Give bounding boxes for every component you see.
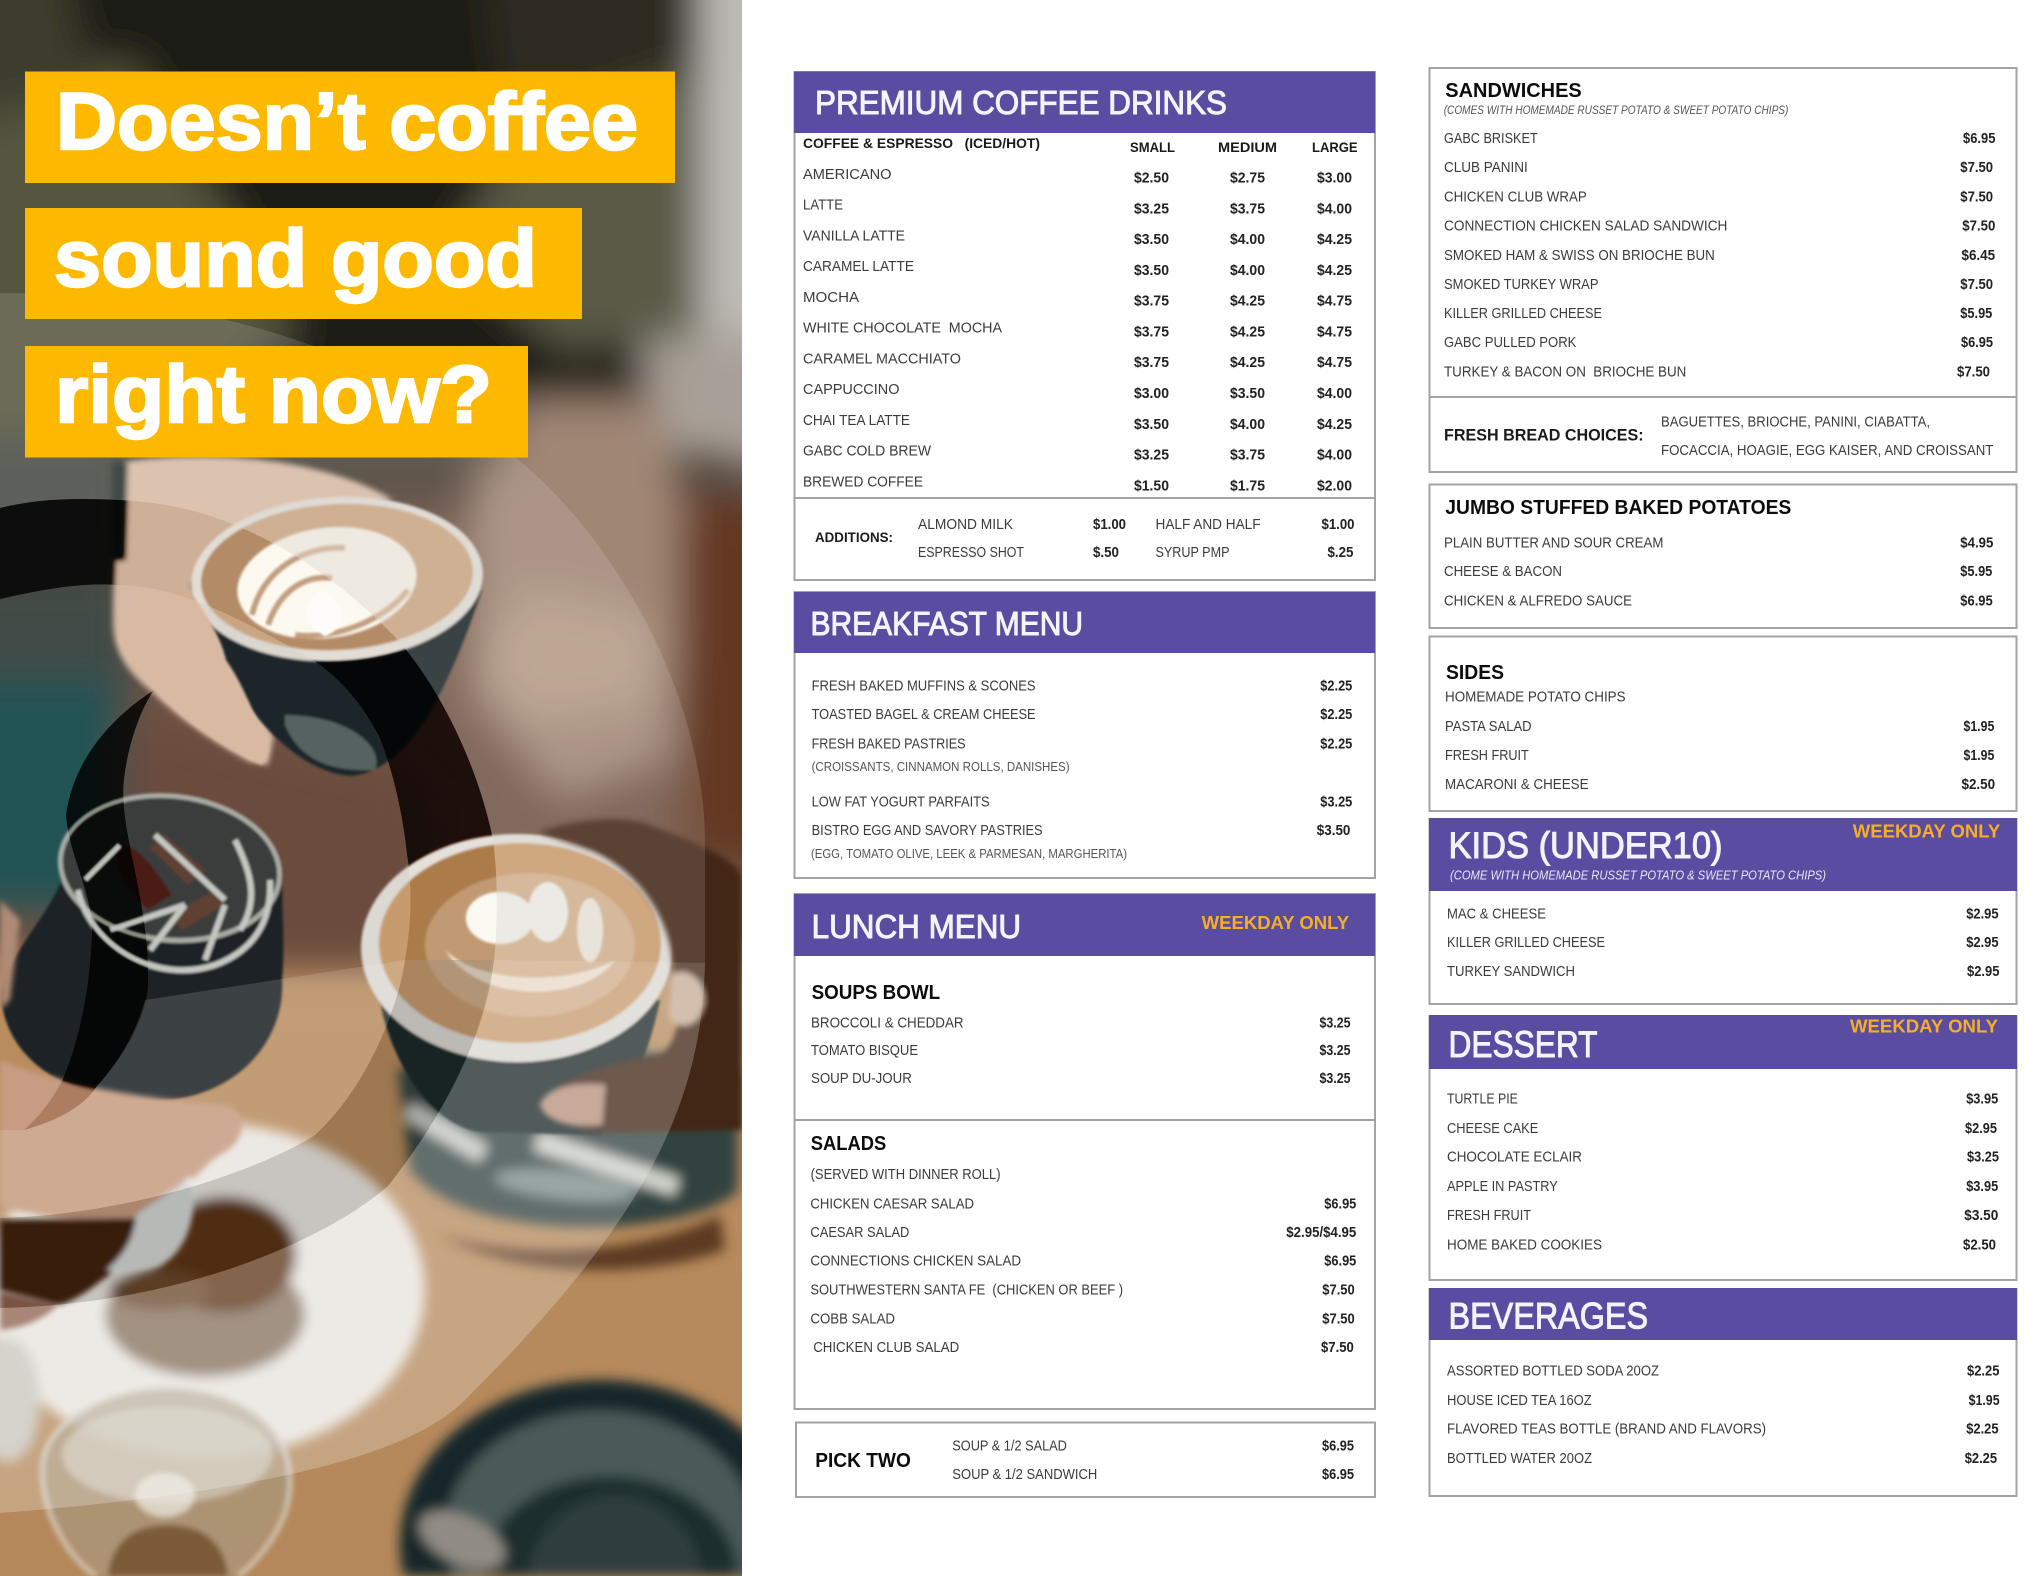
header: kids: KIDS (UNDER10) (1448, 825, 1722, 866)
breakfast rows: FRESH BAKED MUFFINS & SCONES (812, 679, 1036, 695)
headline (25, 72, 675, 458)
sandwich rows (1444, 131, 1995, 380)
icon: hand holding glass (0, 900, 242, 1330)
soups: SOUPS BOWL (812, 982, 940, 1004)
drink rows: VANILLA LATTE (803, 228, 905, 244)
additions: $.50 (1093, 545, 1119, 561)
sandwich rows: SMOKED TURKEY WRAP (1444, 277, 1598, 293)
sandwich rows: CHICKEN CLUB WRAP (1444, 190, 1587, 206)
drink rows: CAPPUCCINO (803, 382, 900, 398)
plate and cookie (0, 1122, 425, 1458)
panel: jumbo stuffed baked potatoes: CHEESE & BACON (1444, 564, 1562, 580)
saucer under second cup (398, 1048, 738, 1227)
drink rows: $4.75 (1317, 294, 1352, 310)
icon: iced coffee glass (2, 785, 287, 1101)
header: kids: WEEKDAY ONLY (1853, 822, 2000, 842)
breakfast rows: BISTRO EGG AND SAVORY PASTRIES (812, 823, 1043, 839)
sandwich rows: GABC PULLED PORK (1444, 335, 1577, 351)
salads: $2.95/$4.95 (1286, 1225, 1356, 1241)
panel: pick two: SOUP & 1/2 SANDWICH (952, 1467, 1097, 1483)
panel: pick two: SOUP & 1/2 SALAD (952, 1438, 1067, 1454)
additions: $1.00 (1093, 517, 1126, 533)
breakfast rows: FRESH BAKED PASTRIES (812, 736, 966, 752)
breakfast rows: $3.50 (1317, 823, 1350, 839)
kids rows: $2.95 (1967, 964, 1999, 980)
salads: $7.50 (1322, 1282, 1355, 1298)
dessert rows (1447, 1092, 1999, 1253)
drink rows: $4.25 (1317, 417, 1352, 433)
panel: jumbo stuffed baked potatoes: $4.95 (1960, 536, 1993, 552)
sandwich rows: CLUB PANINI (1444, 160, 1528, 176)
additions: SYRUP PMP (1156, 545, 1230, 561)
additions: $1.00 (1322, 517, 1354, 533)
header: breakfast menu (794, 592, 1375, 653)
column headings: MEDIUM (1218, 139, 1277, 155)
header: premium coffee drinks: PREMIUM COFFEE DRINKS (815, 84, 1227, 121)
header: beverages (1429, 1288, 2017, 1340)
drink rows: $3.00 (1134, 386, 1169, 402)
salads: CAESAR SALAD (810, 1225, 909, 1241)
drink rows: WHITE CHOCOLATE MOCHA (803, 321, 1002, 337)
drink rows: $3.50 (1134, 232, 1169, 248)
dessert rows: HOME BAKED COOKIES (1447, 1237, 1602, 1253)
drink rows: $3.25 (1134, 201, 1169, 217)
panel: breakfast menu (794, 592, 1375, 878)
drink rows: $4.00 (1317, 448, 1352, 464)
salads: COBB SALAD (810, 1312, 895, 1328)
fresh bread choices: BAGUETTES, BRIOCHE, PANINI, CIABATTA, (1661, 414, 1930, 430)
fresh bread choices: FRESH BREAD CHOICES: (1444, 426, 1644, 444)
icon: hand holding second cup (539, 819, 742, 1133)
panel: pick two (796, 1422, 1375, 1497)
drink rows: CARAMEL MACCHIATO (803, 351, 961, 367)
dessert rows: TURTLE PIE (1447, 1092, 1518, 1108)
drink rows: $4.25 (1317, 232, 1352, 248)
kids rows: MAC & CHEESE (1447, 906, 1546, 922)
sandwich rows: $7.50 (1960, 160, 1993, 176)
header: lunch menu: WEEKDAY ONLY (1202, 913, 1349, 933)
soups: $3.25 (1320, 1071, 1350, 1087)
drink rows: $3.75 (1230, 448, 1265, 464)
dessert rows: $3.25 (1967, 1150, 1999, 1166)
kids rows: TURKEY SANDWICH (1447, 964, 1575, 980)
panel: sides: HOMEMADE POTATO CHIPS (1445, 690, 1626, 706)
drink rows: $2.75 (1230, 171, 1265, 187)
drink rows: BREWED COFFEE (803, 474, 923, 490)
salads: CHICKEN CLUB SALAD (813, 1340, 959, 1356)
salads (810, 1133, 1356, 1356)
header: lunch menu (794, 894, 1375, 956)
overlay: quote tail highlight (0, 960, 705, 1513)
beverage rows: $2.25 (1967, 1364, 1999, 1380)
dessert rows: $3.50 (1964, 1208, 1998, 1224)
heading: sandwiches (1444, 80, 1788, 117)
drink rows: AMERICANO (803, 167, 892, 183)
breakfast rows: (EGG, TOMATO OLIVE, LEEK & PARMESAN, MARGHERITA) (811, 846, 1127, 861)
sandwich rows: KILLER GRILLED CHEESE (1444, 306, 1602, 322)
drink rows (803, 167, 1352, 494)
salads: $7.50 (1322, 1312, 1355, 1328)
dessert rows: CHOCOLATE ECLAIR (1447, 1150, 1582, 1166)
drink rows: $4.25 (1230, 294, 1265, 310)
kids rows: KILLER GRILLED CHEESE (1447, 935, 1605, 951)
dessert rows: APPLE IN PASTRY (1447, 1179, 1558, 1195)
header: dessert: DESSERT (1448, 1024, 1598, 1065)
icon: second coffee cup (361, 834, 673, 1135)
column headings: SMALL (1130, 139, 1175, 155)
soups (811, 982, 1350, 1087)
beverage rows: ASSORTED BOTTLED SODA 20OZ (1447, 1364, 1659, 1380)
photo: coffee cheers with overlay (0, 0, 802, 1576)
dark saucer (400, 1380, 800, 1576)
icon: first coffee cup (187, 489, 487, 776)
soups: SOUP DU-JOUR (811, 1071, 912, 1087)
dessert rows: $3.95 (1966, 1179, 1998, 1195)
soups: TOMATO BISQUE (811, 1043, 918, 1059)
salads: CHICKEN CAESAR SALAD (810, 1196, 974, 1212)
overlay: inner quote highlight (0, 960, 405, 1218)
drink rows: $3.75 (1134, 324, 1169, 340)
drink rows: $4.25 (1317, 263, 1352, 279)
panel: pick two: PICK TWO (815, 1450, 911, 1472)
drink rows: GABC COLD BREW (803, 444, 931, 460)
heading: sandwiches: SANDWICHES (1445, 80, 1582, 102)
panel: sandwiches (1429, 68, 2017, 472)
beverage rows: $2.25 (1966, 1422, 1999, 1438)
panel: sides: FRESH FRUIT (1445, 748, 1529, 764)
overlay: light outer quote arc (0, 293, 705, 1513)
panel: jumbo stuffed baked potatoes: PLAIN BUTTER AND SOUR CREAM (1444, 536, 1663, 552)
soups: $3.25 (1320, 1016, 1350, 1032)
soups: BROCCOLI & CHEDDAR (811, 1016, 964, 1032)
panel: pick two: $6.95 (1322, 1438, 1354, 1454)
drink rows: $4.00 (1230, 232, 1265, 248)
overlay: lower quote ring (0, 960, 494, 1308)
panel: sides: $1.95 (1964, 748, 1994, 764)
column headings (803, 135, 1358, 155)
yellow banner line 3: right now? (55, 350, 492, 440)
beverage rows: HOUSE ICED TEA 16OZ (1447, 1393, 1592, 1409)
drink rows: $4.25 (1230, 355, 1265, 371)
dessert rows: CHEESE CAKE (1447, 1121, 1539, 1137)
yellow banner line 3 (25, 346, 528, 458)
breakfast rows: TOASTED BAGEL & CREAM CHEESE (812, 707, 1036, 723)
beverage rows (1447, 1364, 2000, 1467)
overlay: high-contrast quote band and crescent (0, 499, 497, 1130)
yellow banner line 2: sound good (54, 214, 537, 304)
drink rows: $1.50 (1134, 478, 1169, 494)
drink rows: $3.50 (1230, 386, 1265, 402)
salads: $6.95 (1324, 1254, 1356, 1270)
drink rows: $4.75 (1317, 324, 1352, 340)
panel: jumbo stuffed baked potatoes (1430, 484, 2016, 628)
icon: hand holding first cup (112, 456, 393, 765)
salads: SALADS (811, 1133, 886, 1155)
header: kids (1429, 818, 2017, 891)
drink rows: $3.75 (1230, 201, 1265, 217)
drink rows: $4.00 (1230, 417, 1265, 433)
breakfast rows: $3.25 (1320, 794, 1352, 810)
yellow banner line 1 (25, 72, 675, 183)
kids rows: $2.95 (1966, 935, 1999, 951)
panel: sides: MACARONI & CHEESE (1445, 777, 1589, 793)
sandwich rows: $5.95 (1960, 306, 1992, 322)
drink rows: $4.25 (1230, 324, 1265, 340)
breakfast rows: (CROISSANTS, CINNAMON ROLLS, DANISHES) (812, 759, 1070, 774)
panel: sides (1430, 636, 2016, 811)
dessert rows: $3.95 (1966, 1092, 1998, 1108)
drink rows: MOCHA (803, 290, 859, 306)
panel: pick two: $6.95 (1322, 1467, 1354, 1483)
drink rows: $4.00 (1317, 386, 1352, 402)
sandwich rows: $7.50 (1960, 190, 1993, 206)
soups: $3.25 (1320, 1043, 1350, 1059)
fresh bread choices (1444, 414, 1994, 459)
yellow banner line 2 (25, 208, 582, 319)
header: beverages: BEVERAGES (1448, 1296, 1648, 1336)
breakfast rows: $2.25 (1320, 707, 1352, 723)
kids rows: $2.95 (1966, 906, 1999, 922)
panel: sides: $1.95 (1964, 719, 1994, 735)
panel: jumbo stuffed baked potatoes: JUMBO STUFFED BAKED POTATOES (1445, 497, 1791, 519)
header: kids: (COME WITH HOMEMADE RUSSET POTATO & SWEET POTATO CHIPS) (1450, 868, 1826, 882)
panel: jumbo stuffed baked potatoes: $5.95 (1960, 564, 1992, 580)
panel: premium coffee drinks (794, 72, 1375, 580)
panel: jumbo stuffed baked potatoes: CHICKEN & ALFREDO SAUCE (1444, 593, 1632, 609)
kids rows (1447, 906, 1999, 980)
sandwich rows: CONNECTION CHICKEN SALAD SANDWICH (1444, 219, 1727, 235)
breakfast rows (811, 679, 1352, 861)
drink rows: CHAI TEA LATTE (803, 413, 910, 429)
drink rows: LATTE (803, 198, 843, 214)
panel: sides: $2.50 (1962, 777, 1995, 793)
header: dessert (1429, 1015, 2017, 1069)
yellow banner line 1: Doesn’t coffee (56, 77, 638, 167)
breakfast rows: LOW FAT YOGURT PARFAITS (812, 794, 990, 810)
header: lunch menu: LUNCH MENU (812, 908, 1021, 945)
drink rows: $4.75 (1317, 355, 1352, 371)
additions: ESPRESSO SHOT (918, 545, 1024, 561)
left glass (0, 1338, 40, 1462)
header: premium coffee drinks (794, 72, 1375, 133)
beverage rows: FLAVORED TEAS BOTTLE (BRAND AND FLAVORS) (1447, 1422, 1766, 1438)
drink rows: $2.00 (1317, 478, 1352, 494)
sandwich rows: SMOKED HAM & SWISS ON BRIOCHE BUN (1444, 248, 1715, 264)
panel: sides: PASTA SALAD (1445, 719, 1532, 735)
salads: $7.50 (1321, 1340, 1354, 1356)
beverage rows: $2.25 (1965, 1451, 1997, 1467)
drink rows: $3.25 (1134, 448, 1169, 464)
sandwich rows: $7.50 (1957, 364, 1990, 380)
header: breakfast menu: BREAKFAST MENU (810, 605, 1083, 642)
drink rows: $2.50 (1134, 171, 1169, 187)
salads: $6.95 (1324, 1196, 1356, 1212)
breakfast rows: $2.25 (1320, 736, 1352, 752)
panel: dessert (1429, 1015, 2017, 1280)
panel: lunch menu (794, 894, 1375, 1409)
additions: ADDITIONS: (815, 529, 893, 545)
drink rows: $3.00 (1317, 171, 1352, 187)
sandwich rows: $6.95 (1963, 131, 1995, 147)
sandwich rows: $7.50 (1962, 219, 1995, 235)
additions (815, 517, 1354, 561)
column headings: COFFEE & ESPRESSO (ICED/HOT) (803, 135, 1040, 151)
fresh bread choices: FOCACCIA, HOAGIE, EGG KAISER, AND CROISSANT (1661, 443, 1994, 459)
beverage rows: BOTTLED WATER 20OZ (1447, 1451, 1592, 1467)
dessert rows: $2.50 (1963, 1237, 1996, 1253)
heading: sandwiches: (COMES WITH HOMEMADE RUSSET POTATO & SWEET POTATO CHIPS) (1444, 103, 1788, 117)
drink rows: $3.75 (1134, 355, 1169, 371)
salads: CONNECTIONS CHICKEN SALAD (810, 1254, 1021, 1270)
drink rows: $4.00 (1317, 201, 1352, 217)
dessert rows: FRESH FRUIT (1447, 1208, 1531, 1224)
drink rows: CARAMEL LATTE (803, 259, 914, 275)
beverage rows: $1.95 (1969, 1393, 2000, 1409)
additions: HALF AND HALF (1156, 517, 1261, 533)
panel: beverages (1429, 1288, 2017, 1496)
sandwich rows: TURKEY & BACON ON BRIOCHE BUN (1444, 364, 1686, 380)
header: dessert: WEEKDAY ONLY (1850, 1016, 1998, 1036)
drink rows: $3.50 (1134, 263, 1169, 279)
breakfast rows: $2.25 (1320, 679, 1352, 695)
column headings: LARGE (1312, 139, 1358, 155)
panel: kids under 10 (1429, 818, 2017, 1004)
panel: jumbo stuffed baked potatoes: $6.95 (1960, 593, 1993, 609)
additions: $.25 (1328, 545, 1354, 561)
drink rows: $4.00 (1230, 263, 1265, 279)
sandwich rows: $6.45 (1962, 248, 1995, 264)
salads: (SERVED WITH DINNER ROLL) (811, 1167, 1001, 1183)
dessert rows: $2.95 (1965, 1121, 1997, 1137)
bottom glass (40, 1386, 292, 1576)
icon: fingers over first cup (118, 590, 269, 765)
additions: ALMOND MILK (918, 517, 1013, 533)
drink rows: $1.75 (1230, 478, 1265, 494)
sandwich rows: $7.50 (1960, 277, 1993, 293)
sandwich rows: $6.95 (1961, 335, 1993, 351)
sandwich rows: GABC BRISKET (1444, 131, 1538, 147)
salads: SOUTHWESTERN SANTA FE (CHICKEN OR BEEF ) (810, 1282, 1123, 1298)
panel: sides: SIDES (1446, 662, 1504, 684)
drink rows: $3.75 (1134, 294, 1169, 310)
drink rows: $3.50 (1134, 417, 1169, 433)
